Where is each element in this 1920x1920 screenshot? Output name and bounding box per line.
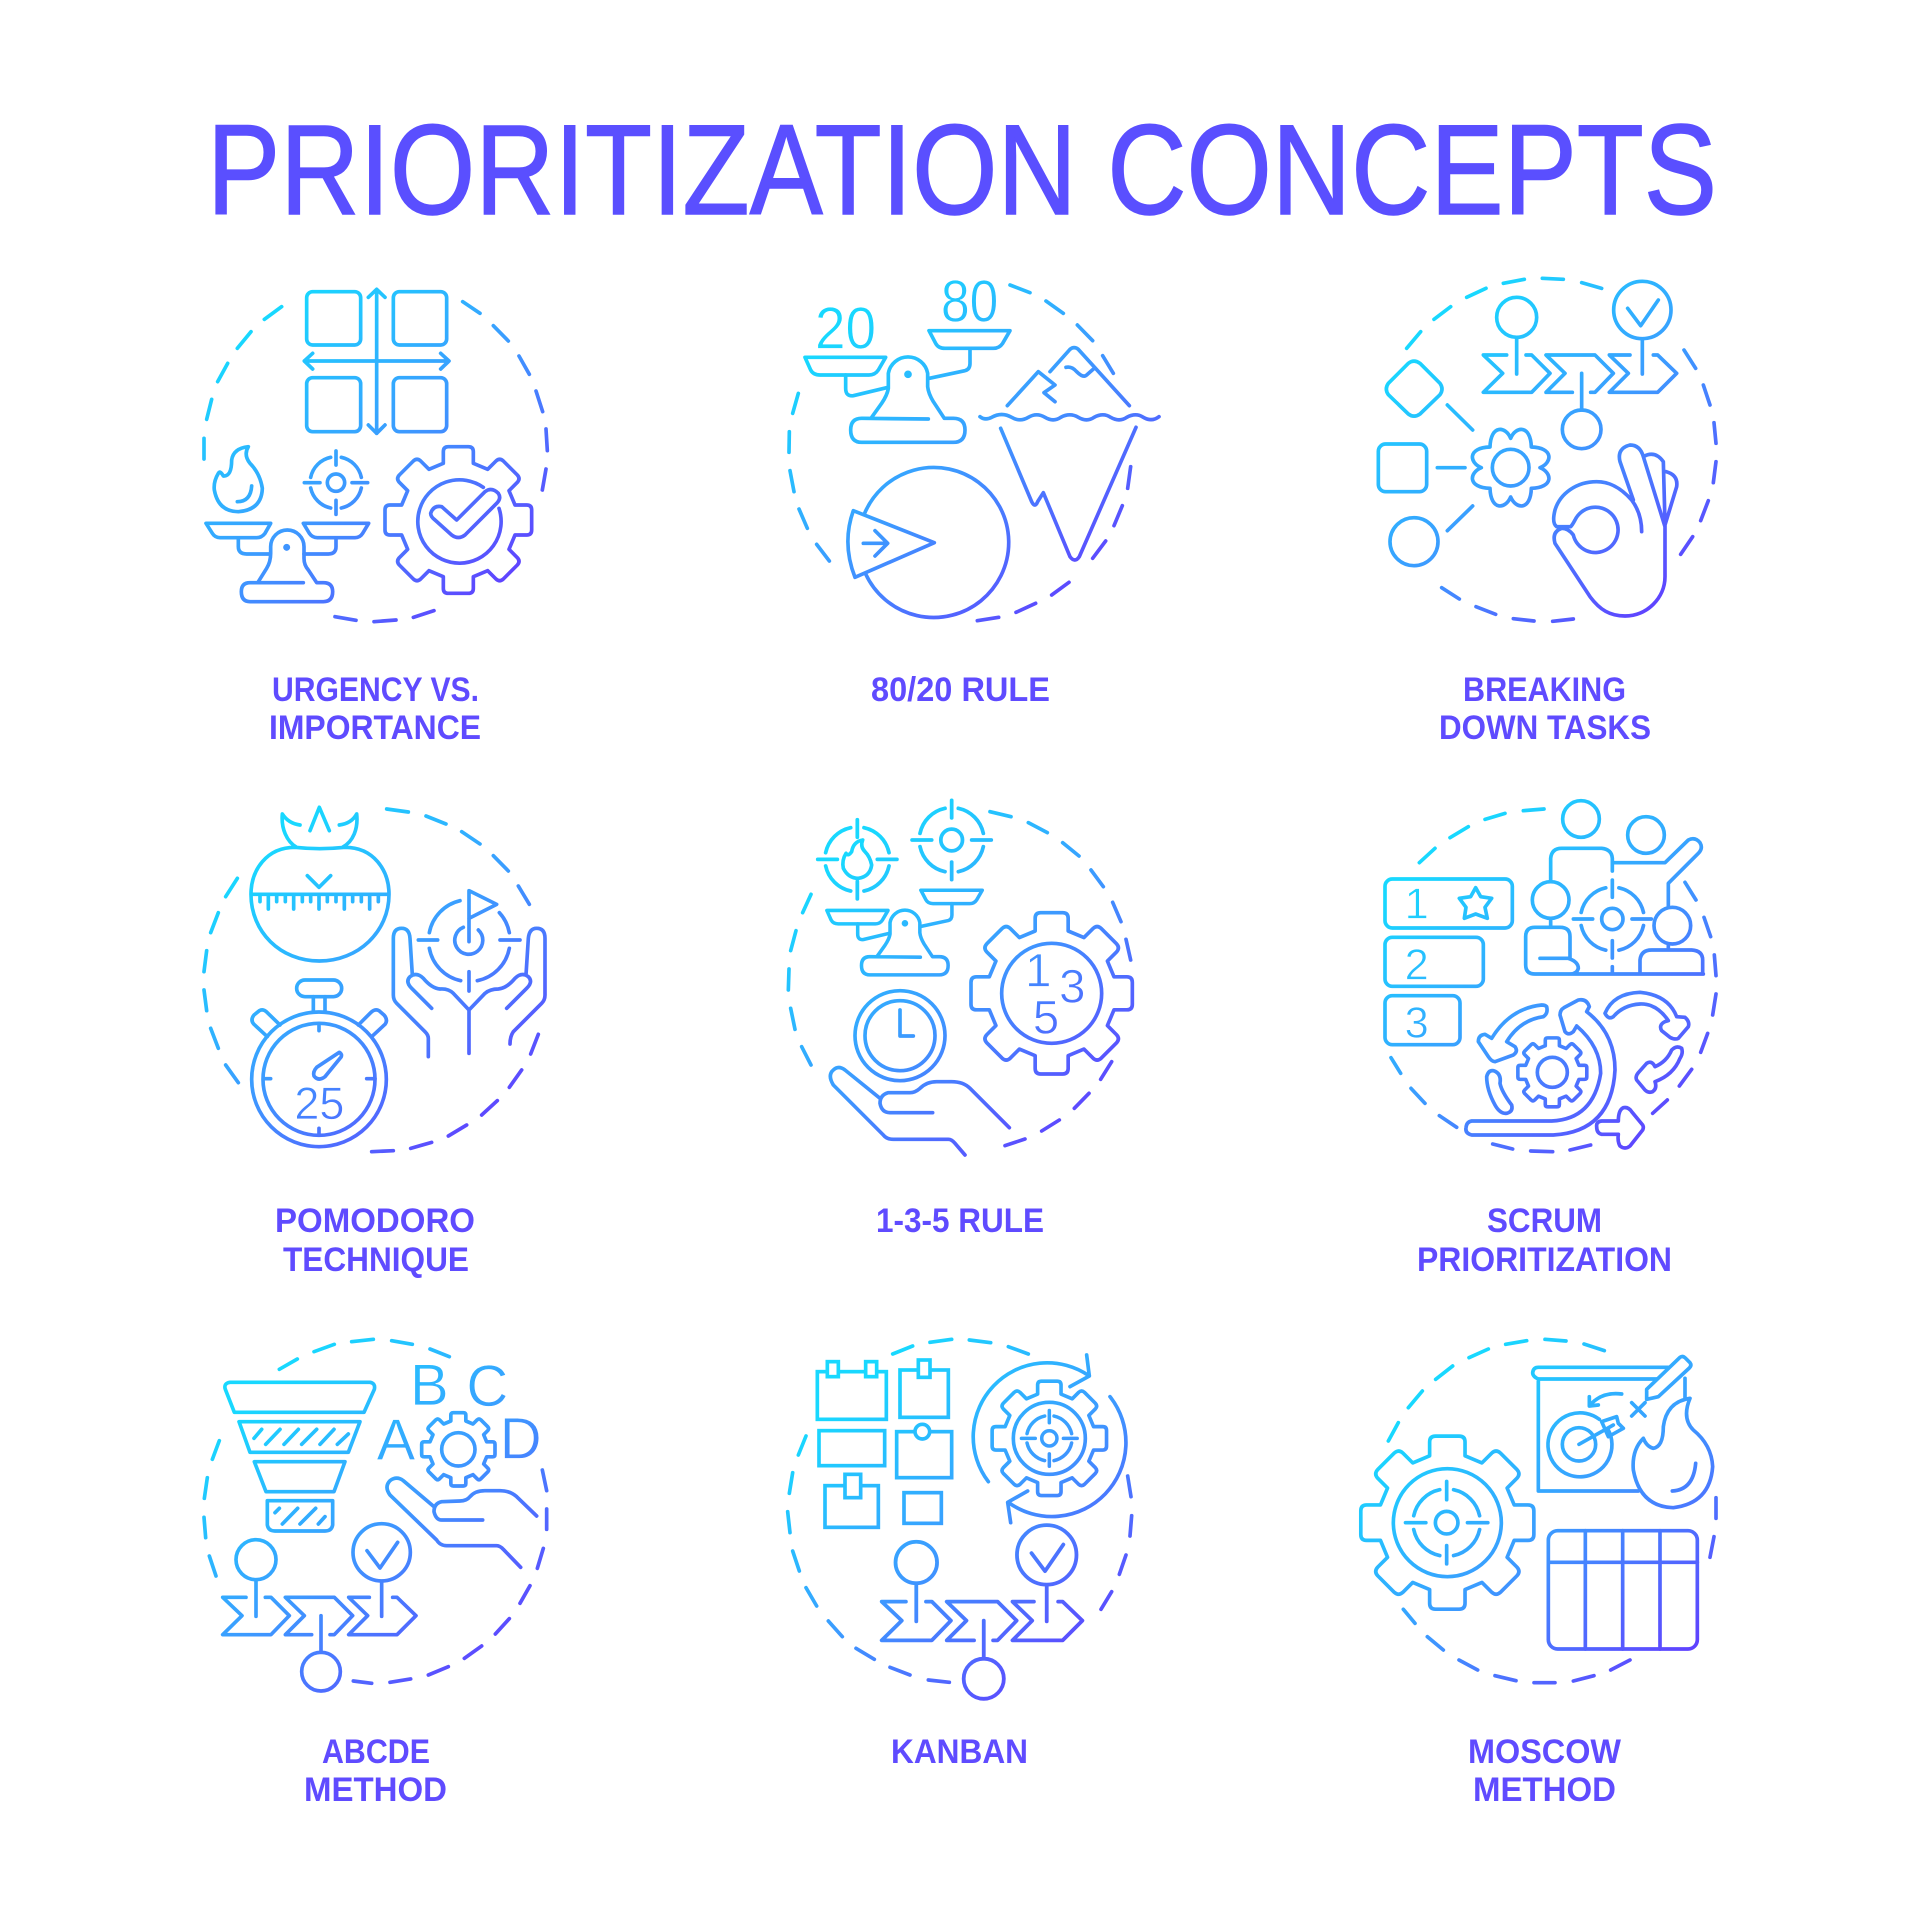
label: abcde method	[304, 1733, 447, 1809]
icon: pie chart with slice	[848, 467, 1009, 617]
icon: flame target	[818, 820, 897, 899]
icon: flame	[214, 447, 262, 512]
label: kanban: KANBAN	[891, 1733, 1028, 1771]
number: 80: 80	[941, 268, 998, 335]
panel: 80/20 rule	[789, 268, 1159, 709]
list: ranked items: 3	[1405, 999, 1429, 1047]
icon: gear with numbers	[971, 913, 1132, 1074]
dashed ring	[1388, 1339, 1716, 1683]
icon: stopwatch	[252, 980, 386, 1147]
icon: target on board	[1548, 1413, 1612, 1477]
icon: balance scale	[206, 523, 369, 602]
letters: A B C D	[377, 1354, 542, 1473]
label: urgency vs importance: IMPORTANCE	[269, 709, 481, 747]
dashed ring	[788, 1339, 1132, 1682]
icon: target	[912, 800, 991, 880]
icon: scrum prioritization	[1385, 801, 1716, 1152]
icon: team around target	[1526, 801, 1703, 974]
list: ranked items: 2	[1405, 941, 1429, 989]
panel: pomodoro technique	[204, 807, 545, 1279]
icon: tomato timer	[251, 807, 389, 961]
icon: pomodoro technique	[204, 807, 545, 1152]
label: breaking down tasks: BREAKING	[1463, 671, 1626, 709]
label: abcde method: METHOD	[304, 1771, 447, 1809]
letters: A B C D: C	[466, 1355, 508, 1419]
panel: kanban	[788, 1339, 1132, 1771]
icon: gear	[422, 1413, 495, 1486]
icon: gear with numbers: 3	[1059, 961, 1085, 1014]
label: breaking down tasks	[1439, 671, 1651, 747]
label: moscow method	[1468, 1733, 1622, 1809]
icon: flame	[1633, 1398, 1713, 1508]
icon: gear with target and cycle arrows	[973, 1355, 1126, 1523]
label: moscow method: MOSCOW	[1468, 1733, 1622, 1771]
label: urgency vs importance	[269, 671, 481, 747]
label: pomodoro technique: POMODORO	[275, 1202, 475, 1240]
dashed ring	[204, 302, 547, 622]
icon: 80/20 rule	[789, 268, 1159, 621]
icon: gear with numbers: 5	[1033, 991, 1059, 1044]
panel: urgency vs importance	[204, 289, 547, 747]
panel: abcde method	[204, 1339, 547, 1809]
label: abcde method: ABCDE	[322, 1733, 430, 1771]
panel: 1-3-5 rule	[788, 800, 1132, 1240]
letters: A B C D: B	[410, 1354, 449, 1418]
icon: urgency vs importance	[204, 289, 547, 622]
icon: clock on hand	[830, 991, 1009, 1155]
icon: gear with numbers: 1	[1025, 945, 1051, 998]
icon: milestone timeline	[882, 1525, 1082, 1699]
list: ranked items: 1	[1405, 881, 1429, 929]
icon: sticky notes board	[817, 1360, 952, 1527]
label: urgency vs importance: URGENCY VS.	[272, 671, 479, 709]
label: moscow method: METHOD	[1473, 1771, 1616, 1809]
icon: gear with target	[1361, 1436, 1534, 1609]
label: scrum prioritization: PRIORITIZATION	[1417, 1241, 1672, 1279]
icon: moscow method	[1361, 1339, 1716, 1683]
panel: scrum prioritization	[1385, 801, 1716, 1279]
icon: tilted scale	[805, 331, 1010, 442]
dashed ring	[789, 285, 1131, 621]
icon: iceberg	[980, 348, 1159, 560]
label: scrum prioritization: SCRUM	[1487, 1202, 1602, 1240]
icon: funnel	[225, 1382, 375, 1531]
icon: kanban	[788, 1339, 1132, 1699]
number: 20: 20	[815, 294, 876, 361]
label: 1-3-5 rule: 1-3-5 RULE	[876, 1202, 1044, 1240]
icon: breaking down tasks	[1378, 278, 1716, 621]
icon: strategy board with dart and pen	[1533, 1356, 1691, 1491]
icon: table	[1548, 1531, 1697, 1649]
icon: milestone timeline	[1483, 281, 1677, 449]
title: PRIORITIZATION CONCEPTS	[207, 99, 1717, 242]
icon: target	[304, 451, 368, 514]
icon: sprint cycle arrows	[1466, 992, 1689, 1148]
letters: A B C D: D	[500, 1407, 542, 1471]
icon: ok hand	[1554, 445, 1677, 616]
number: 25: 25	[294, 1078, 344, 1129]
dashed ring	[1407, 278, 1716, 621]
label: breaking down tasks: DOWN TASKS	[1439, 709, 1651, 747]
panel: breaking down tasks	[1378, 278, 1716, 747]
icon: shapes into gear	[1378, 361, 1549, 566]
icon: hands holding flag target	[393, 891, 545, 1057]
icon: tilted scale	[827, 890, 982, 975]
icon: abcde method	[204, 1339, 547, 1691]
icon: milestone timeline	[223, 1524, 416, 1691]
dashed ring	[788, 812, 1131, 1146]
label: pomodoro technique: TECHNIQUE	[283, 1241, 469, 1279]
label: pomodoro technique	[275, 1202, 475, 1279]
panel: moscow method	[1361, 1339, 1716, 1809]
label: 80/20 rule: 80/20 RULE	[871, 671, 1050, 709]
dashed ring	[1391, 809, 1716, 1152]
icon: priority matrix	[304, 289, 449, 433]
letters: A B C D: A	[377, 1409, 416, 1473]
list: ranked items	[1385, 879, 1512, 1047]
icon: hand	[387, 1478, 537, 1567]
icon: 1-3-5 rule	[788, 800, 1132, 1155]
dashed ring	[204, 1339, 547, 1683]
label: scrum prioritization	[1417, 1202, 1672, 1279]
dashed ring	[204, 809, 538, 1152]
icon: gear with check	[385, 447, 532, 593]
